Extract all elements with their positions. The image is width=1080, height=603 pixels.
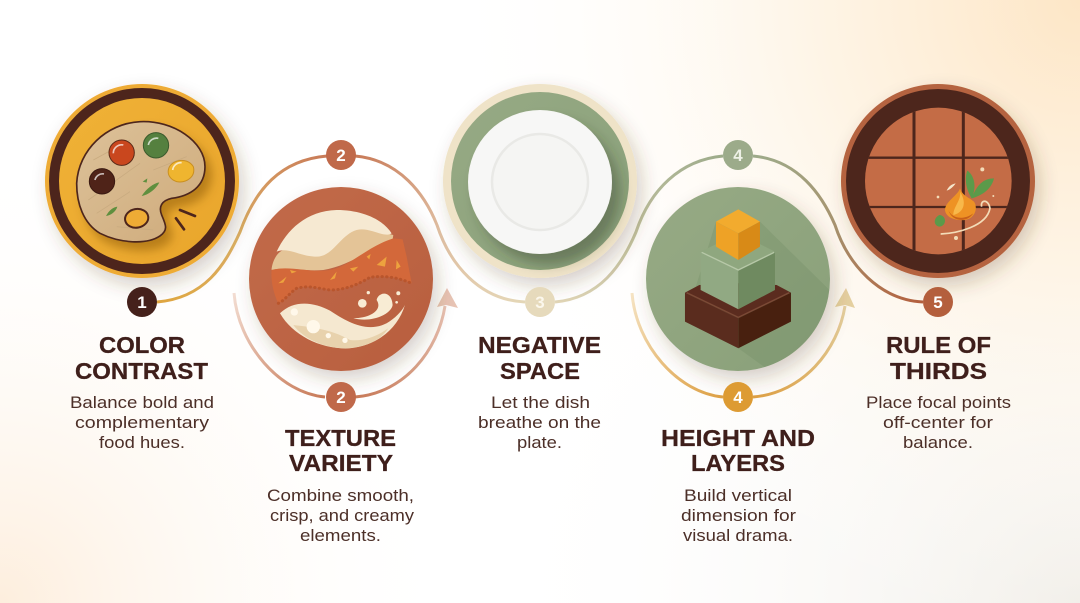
connector: step 4 to step 5 bbox=[753, 156, 923, 302]
heading: rule of thirds: RULE OF bbox=[886, 332, 991, 358]
badge 4 bottom bbox=[723, 382, 753, 412]
badge 3: 3 bbox=[535, 293, 545, 312]
arrow: lower arc around step 2 bbox=[234, 288, 458, 397]
text: color contrast description: food hues. bbox=[99, 433, 185, 452]
text: negative space description: plate. bbox=[517, 433, 562, 452]
text: height and layers description: visual drama. bbox=[683, 526, 793, 545]
panel: rule of thirds icon bbox=[841, 84, 1035, 278]
heading: texture variety bbox=[285, 425, 396, 476]
icon: painter palette bbox=[77, 122, 205, 242]
connector: step 1 to step 2 bbox=[157, 156, 327, 302]
badge 2 bottom bbox=[326, 382, 356, 412]
badge 2 bottom: 2 bbox=[336, 388, 346, 407]
badge 4 top bbox=[723, 140, 753, 170]
heading: height and layers: HEIGHT AND bbox=[661, 425, 815, 451]
panel: negative space icon bbox=[443, 84, 637, 278]
panel: height and layers icon bbox=[646, 187, 863, 390]
text: negative space description: Let the dish bbox=[491, 393, 590, 412]
panel: texture variety icon bbox=[249, 187, 433, 371]
text: height and layers description: Build vertical bbox=[684, 486, 792, 505]
badge 3 bbox=[525, 287, 555, 317]
text: color contrast description: complementary bbox=[75, 413, 210, 432]
heading: color contrast: COLOR bbox=[99, 332, 185, 358]
heading: color contrast: CONTRAST bbox=[75, 358, 209, 384]
badge 5: 5 bbox=[933, 293, 943, 312]
text: rule of thirds description bbox=[866, 393, 1011, 452]
connector: step 2 to step 3 bbox=[355, 156, 525, 302]
heading: negative space: SPACE bbox=[500, 358, 580, 384]
text: texture variety description: crisp, and creamy bbox=[270, 506, 415, 525]
text: rule of thirds description: off-center for bbox=[883, 413, 993, 432]
badge 2 top bbox=[326, 140, 356, 170]
text: texture variety description: Combine smooth, bbox=[267, 486, 414, 505]
text: negative space description: breathe on the bbox=[478, 413, 601, 432]
icon: layered food textures bbox=[271, 210, 412, 348]
text: texture variety description bbox=[267, 486, 415, 545]
connector: step 3 to step 4 bbox=[555, 156, 723, 302]
heading: rule of thirds bbox=[886, 332, 991, 384]
heading: height and layers: LAYERS bbox=[691, 450, 785, 476]
arrow: lower arc around step 4 bbox=[632, 288, 855, 397]
heading: texture variety: TEXTURE bbox=[285, 425, 396, 451]
text: height and layers description: dimension for bbox=[681, 506, 796, 525]
badge 2 top: 2 bbox=[336, 146, 346, 165]
heading: negative space: NEGATIVE bbox=[478, 332, 601, 358]
icon: grid plate with garnish bbox=[865, 108, 1012, 254]
icon: white plate bbox=[468, 110, 612, 254]
icon: stacked cubes bbox=[684, 209, 830, 367]
heading: texture variety: VARIETY bbox=[289, 450, 393, 476]
badge 1 bbox=[127, 287, 157, 317]
text: height and layers description bbox=[681, 486, 796, 545]
badge 1: 1 bbox=[137, 293, 147, 312]
heading: color contrast bbox=[75, 332, 209, 384]
text: negative space description bbox=[478, 393, 601, 452]
heading: rule of thirds: THIRDS bbox=[890, 358, 987, 384]
panel: color contrast icon bbox=[45, 84, 239, 278]
badge 4 bottom: 4 bbox=[733, 388, 743, 407]
text: texture variety description: elements. bbox=[300, 526, 381, 545]
heading: negative space bbox=[478, 332, 601, 384]
text: rule of thirds description: Place focal points bbox=[866, 393, 1011, 412]
text: color contrast description bbox=[70, 393, 214, 452]
text: rule of thirds description: balance. bbox=[903, 433, 973, 452]
badge 4 top: 4 bbox=[733, 146, 743, 165]
badge 5 bbox=[923, 287, 953, 317]
heading: height and layers bbox=[661, 425, 815, 476]
text: color contrast description: Balance bold and bbox=[70, 393, 214, 412]
